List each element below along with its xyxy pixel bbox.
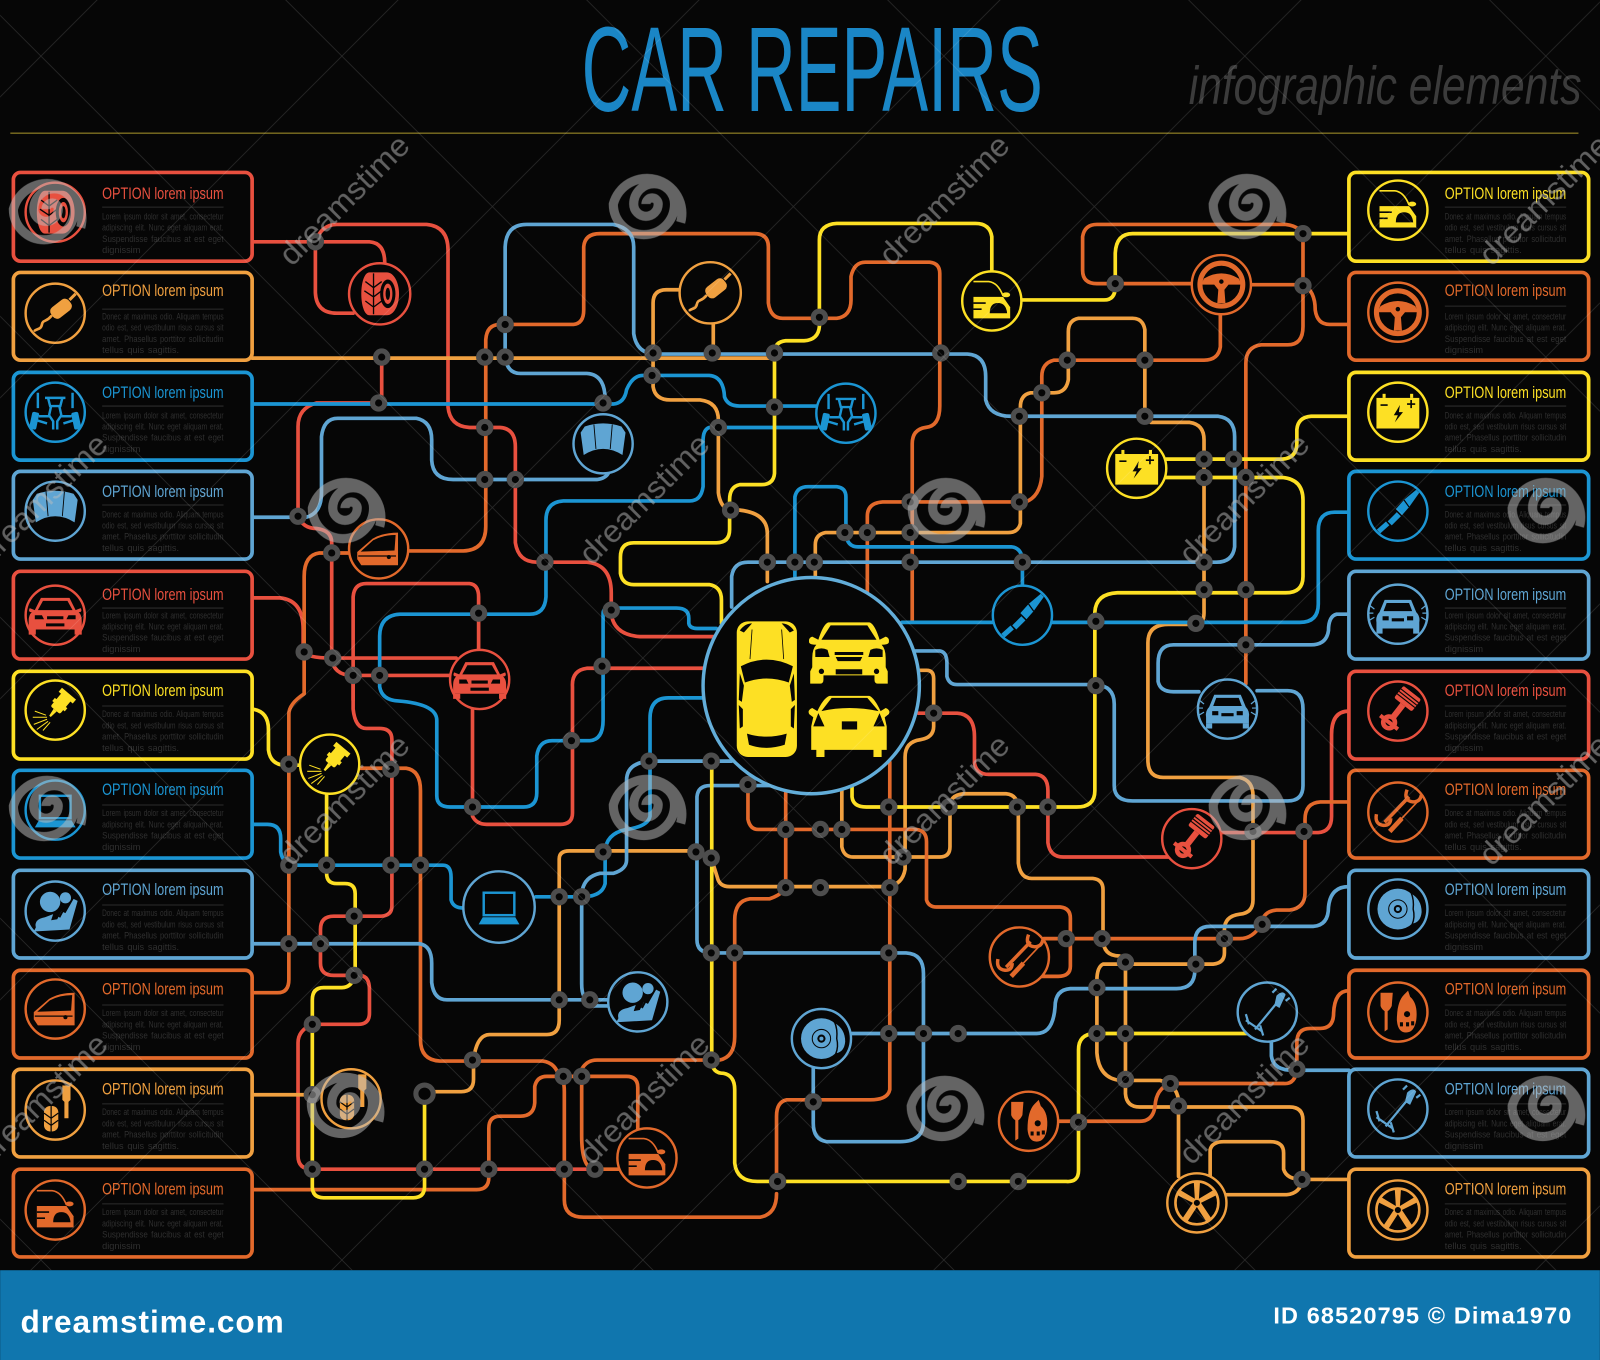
card: brake disc bbox=[1349, 870, 1589, 958]
card: tire: OPTION lorem ipsum bbox=[102, 184, 224, 203]
card: body repair: adipiscing elit. Nunc eget aliquam erat. bbox=[102, 1218, 224, 1228]
card: car front: adipiscing elit. Nunc eget aliquam erat. bbox=[102, 621, 224, 631]
card: brake disc: Suspendisse faucibus at est eget bbox=[1445, 931, 1567, 941]
footer logo: dreamstime.com bbox=[21, 1303, 284, 1339]
card: axle: dignissim bbox=[1445, 1141, 1483, 1151]
card: car front: Lorem ipsum dolor sit amet, consectetur bbox=[102, 610, 224, 620]
card: chains: odio est, sed vestibulum risus cursus sit bbox=[102, 1118, 224, 1128]
card: alloy wheel bbox=[1349, 1169, 1589, 1257]
card: suspension: Suspendisse faucibus at est eget bbox=[102, 433, 224, 443]
icon: battery bbox=[1107, 439, 1166, 498]
card: door: adipiscing elit. Nunc eget aliquam erat. bbox=[102, 1019, 224, 1029]
card: alloy wheel: tellus quis sagittis. bbox=[1445, 1241, 1522, 1251]
card: tools bbox=[1349, 770, 1589, 858]
card: tire: adipiscing elit. Nunc eget aliquam erat. bbox=[102, 223, 224, 233]
light orange routes bbox=[252, 290, 1349, 1195]
card: headlights: Suspendisse faucibus at est eget bbox=[1445, 633, 1567, 643]
card: car keys: tellus quis sagittis. bbox=[1445, 1042, 1522, 1052]
card: airbag: Donec at maximus odio. Aliquam tempus bbox=[102, 908, 224, 918]
card: brake disc: dignissim bbox=[1445, 942, 1483, 952]
car front view bbox=[809, 622, 889, 684]
watermark: dreamstime bbox=[571, 1026, 717, 1171]
icon: suspension bbox=[816, 384, 875, 443]
icon: body repair bbox=[617, 1128, 677, 1188]
card: car fender: amet. Phasellus porttitor sollicitudin bbox=[1445, 234, 1566, 244]
yellow routes bbox=[252, 223, 1349, 1198]
icon: tools bbox=[990, 927, 1049, 987]
watermark: dreamstime bbox=[271, 727, 417, 872]
card: injector: tellus quis sagittis. bbox=[102, 743, 179, 753]
card: body repair bbox=[13, 1169, 252, 1257]
card: piston: dignissim bbox=[1445, 743, 1483, 753]
card: injector: amet. Phasellus porttitor sollicitudin bbox=[102, 732, 224, 742]
card: airbag: OPTION lorem ipsum bbox=[102, 880, 224, 899]
footer bar bbox=[0, 1270, 1600, 1360]
card: hood: tellus quis sagittis. bbox=[102, 543, 179, 553]
card: door: Suspendisse faucibus at est eget bbox=[102, 1031, 224, 1041]
card: injector: Donec at maximus odio. Aliquam tempus bbox=[102, 709, 224, 719]
icon: fuel injector bbox=[300, 735, 359, 794]
card: car fender bbox=[1349, 172, 1589, 261]
blue routes bbox=[252, 375, 1349, 908]
icon: headlights bbox=[1198, 679, 1257, 739]
card: car front: dignissim bbox=[102, 644, 141, 654]
card: chains: Donec at maximus odio. Aliquam tempus bbox=[102, 1107, 224, 1117]
card: steering wheel: Suspendisse faucibus at est eget bbox=[1445, 334, 1567, 344]
card: airbag: amet. Phasellus porttitor sollicitudin bbox=[102, 931, 224, 941]
watermark: dreamstime bbox=[871, 727, 1017, 872]
icon: laptop bbox=[463, 871, 535, 943]
card: door: dignissim bbox=[102, 1042, 141, 1052]
card: car keys bbox=[1349, 970, 1589, 1058]
card: tools: amet. Phasellus porttitor sollicitudin bbox=[1445, 831, 1566, 841]
card: piston bbox=[1349, 671, 1589, 759]
icon: axle bbox=[1238, 983, 1297, 1042]
dark orange routes bbox=[252, 224, 1349, 1217]
card: exhaust: Donec at maximus odio. Aliquam tempus bbox=[102, 311, 224, 321]
card: axle bbox=[1349, 1069, 1589, 1157]
network icons bbox=[300, 255, 1297, 1232]
card: exhaust: OPTION lorem ipsum bbox=[102, 281, 224, 300]
center hub with three cars bbox=[703, 577, 919, 794]
card: car front bbox=[13, 571, 252, 659]
card: tire bbox=[13, 172, 252, 261]
card: laptop: Lorem ipsum dolor sit amet, consectetur bbox=[102, 808, 224, 818]
icon: airbag bbox=[608, 972, 667, 1031]
red routes bbox=[252, 224, 1349, 1169]
title: CAR REPAIRS bbox=[582, 2, 1043, 137]
icon: spark plug bbox=[993, 586, 1052, 645]
icon: car front bbox=[450, 650, 509, 709]
card: steering wheel bbox=[1349, 272, 1589, 360]
card: laptop: adipiscing elit. Nunc eget aliquam erat. bbox=[102, 819, 224, 829]
light blue routes bbox=[252, 224, 1349, 1142]
card: exhaust bbox=[13, 272, 252, 360]
card: body repair: OPTION lorem ipsum bbox=[102, 1180, 224, 1199]
card: hood: Donec at maximus odio. Aliquam tempus bbox=[102, 509, 224, 519]
card: door bbox=[13, 970, 252, 1058]
icon: car fender bbox=[962, 271, 1021, 331]
card: steering wheel: dignissim bbox=[1445, 345, 1483, 355]
card: laptop: Suspendisse faucibus at est eget bbox=[102, 831, 224, 841]
card: exhaust: amet. Phasellus porttitor sollicitudin bbox=[102, 334, 224, 344]
card: battery: tellus quis sagittis. bbox=[1445, 444, 1522, 454]
card: laptop bbox=[13, 770, 252, 858]
card: car front: Suspendisse faucibus at est eget bbox=[102, 633, 224, 643]
card: injector: odio est, sed vestibulum risus cursus sit bbox=[102, 720, 224, 730]
card: suspension: OPTION lorem ipsum bbox=[102, 383, 224, 402]
icon: car door bbox=[349, 519, 408, 578]
icon: alloy wheel bbox=[1167, 1173, 1226, 1232]
card: car front: OPTION lorem ipsum bbox=[102, 585, 224, 604]
card: spark plug: tellus quis sagittis. bbox=[1445, 543, 1522, 553]
card: tire: Suspendisse faucibus at est eget bbox=[102, 234, 224, 244]
card: suspension bbox=[13, 372, 252, 460]
watermark: dreamstime bbox=[271, 127, 417, 272]
card: piston: Suspendisse faucibus at est eget bbox=[1445, 732, 1567, 742]
route network bbox=[252, 223, 1349, 1217]
car top view bbox=[737, 621, 797, 757]
card: injector bbox=[13, 671, 252, 759]
card: chains: OPTION lorem ipsum bbox=[102, 1080, 224, 1099]
card: body repair: dignissim bbox=[102, 1241, 141, 1251]
right option cards bbox=[1349, 172, 1589, 1257]
card: suspension: adipiscing elit. Nunc eget aliquam erat. bbox=[102, 422, 224, 432]
card: airbag: odio est, sed vestibulum risus cursus sit bbox=[102, 919, 224, 929]
card: hood: amet. Phasellus porttitor sollicitudin bbox=[102, 532, 224, 542]
card: laptop: dignissim bbox=[102, 842, 141, 852]
icon: snow chains bbox=[322, 1069, 381, 1128]
card: suspension: Lorem ipsum dolor sit amet, consectetur bbox=[102, 410, 224, 420]
watermark: dreamstime bbox=[1171, 1026, 1316, 1171]
card: car keys: amet. Phasellus porttitor sollicitudin bbox=[1445, 1031, 1566, 1041]
left option cards bbox=[13, 172, 252, 1257]
card: injector: OPTION lorem ipsum bbox=[102, 681, 224, 700]
icon: exhaust bbox=[680, 262, 741, 323]
card: spark plug bbox=[1349, 471, 1589, 559]
icon: tire bbox=[349, 263, 410, 324]
card: laptop: OPTION lorem ipsum bbox=[102, 780, 224, 799]
card: chains: amet. Phasellus porttitor sollicitudin bbox=[102, 1130, 224, 1140]
card: axle: Suspendisse faucibus at est eget bbox=[1445, 1130, 1567, 1140]
car rear view bbox=[809, 696, 889, 757]
card: hood: OPTION lorem ipsum bbox=[102, 482, 224, 501]
card: hood: odio est, sed vestibulum risus cursus sit bbox=[102, 520, 224, 530]
watermark: dreamstime bbox=[871, 127, 1017, 272]
card: tire: Lorem ipsum dolor sit amet, consectetur bbox=[102, 211, 224, 221]
card: airbag bbox=[13, 870, 252, 958]
card: chains bbox=[13, 1069, 252, 1157]
icon: car keys bbox=[999, 1092, 1058, 1151]
icon: brake disc bbox=[792, 1009, 851, 1068]
watermark: dreamstime bbox=[1171, 426, 1316, 571]
card: suspension: dignissim bbox=[102, 444, 141, 454]
junction nodes bbox=[283, 228, 1310, 1188]
card: headlights bbox=[1349, 571, 1589, 659]
card: spark plug: amet. Phasellus porttitor sollicitudin bbox=[1445, 532, 1566, 542]
footer image id: ID 68520795 © Dima1970 bbox=[1273, 1302, 1571, 1328]
card: body repair: Suspendisse faucibus at est eget bbox=[102, 1230, 224, 1240]
card: airbag: tellus quis sagittis. bbox=[102, 942, 179, 952]
card: chains: tellus quis sagittis. bbox=[102, 1141, 179, 1151]
watermark bbox=[0, 127, 1600, 1171]
card: car fender: tellus quis sagittis. bbox=[1445, 245, 1522, 255]
card: battery: amet. Phasellus porttitor sollicitudin bbox=[1445, 433, 1566, 443]
icon: hood bbox=[574, 414, 633, 473]
watermark: dreamstime bbox=[571, 426, 717, 571]
card: hood bbox=[13, 471, 252, 559]
card: battery bbox=[1349, 372, 1589, 460]
icon: steering wheel bbox=[1192, 255, 1251, 314]
card: tire: dignissim bbox=[102, 245, 141, 255]
card: exhaust: tellus quis sagittis. bbox=[102, 345, 179, 355]
card: door: Lorem ipsum dolor sit amet, consectetur bbox=[102, 1008, 224, 1018]
card: headlights: dignissim bbox=[1445, 644, 1483, 654]
card: tools: tellus quis sagittis. bbox=[1445, 842, 1522, 852]
card: body repair: Lorem ipsum dolor sit amet, consectetur bbox=[102, 1207, 224, 1217]
card: door: OPTION lorem ipsum bbox=[102, 980, 224, 999]
card: alloy wheel: amet. Phasellus porttitor sollicitudin bbox=[1445, 1230, 1566, 1240]
icon: piston bbox=[1162, 809, 1221, 868]
card: exhaust: odio est, sed vestibulum risus cursus sit bbox=[102, 323, 224, 333]
